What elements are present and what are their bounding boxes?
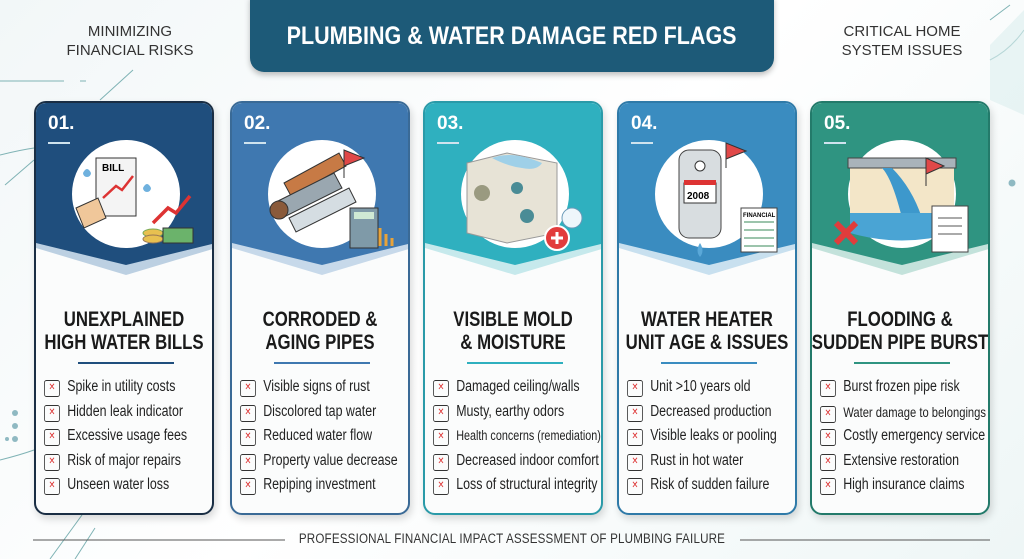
panel: card 2: AGING PIPES [265,331,375,354]
list [44,378,187,495]
panel: card 5: 05. [824,113,850,134]
side label: left [66,23,193,59]
panel: card 3 [423,101,603,515]
panel: card 3: Loss of structural integrity [456,476,597,493]
panel: card 4: Unit >10 years old [650,378,750,395]
icon: bill with rising arrow [72,140,194,248]
panel: card 5: SUDDEN PIPE BURST [812,331,988,354]
panel: card 3: 03. [437,113,463,134]
panel: card 3: Health concerns (remediation) [456,428,601,443]
panel: card 1: 01. [48,113,74,134]
panel: card 3: Damaged ceiling/walls [456,378,580,395]
panel: card 5: High insurance claims [843,476,964,493]
panel: card 2: Repiping investment [263,476,376,493]
list: Excessive usage fees [67,427,187,444]
list: Unseen water loss [67,476,169,493]
panel: card 2: Reduced water flow [263,427,372,444]
panel: card 4 [617,101,797,515]
panel: card 2: Discolored tap water [263,403,376,420]
footer line [33,540,990,541]
title [250,0,774,72]
panel: card 4: Risk of sudden failure [650,476,769,493]
title: PLUMBING & WATER DAMAGE RED FLAGS [287,22,737,50]
panel: card 5: FLOODING & [847,308,953,331]
icon: corroded pipes [268,140,394,248]
panel: card 2 [230,101,410,515]
panel: card 2: Property value decrease [263,452,398,469]
footer text: PROFESSIONAL FINANCIAL IMPACT ASSESSMENT OF PLUMBING FAILURE [299,531,725,546]
side label: right [842,23,962,59]
icon: mold wall [461,140,582,251]
panel: card 3: VISIBLE MOLD [453,308,573,331]
panel: card 5: Costly emergency service [843,427,985,444]
panel: card 2: CORRODED & [263,308,377,331]
panel: card 5 [810,101,990,515]
panel: card 5: Water damage to belongings [843,404,986,420]
panel: card 4: 04. [631,113,657,134]
side label: left: FINANCIAL RISKS [66,42,193,59]
card title [44,308,204,354]
panel: card 4: UNIT AGE & ISSUES [626,331,788,354]
panel: card 4: Rust in hot water [650,452,743,469]
side label: left: MINIMIZING [88,23,172,40]
card title: UNEXPLAINED [64,308,184,331]
icon: water heater: 2008 [687,191,710,202]
icon: bill with rising arrow: BILL [102,163,124,174]
list: Spike in utility costs [67,378,175,395]
list: Risk of major repairs [67,452,181,469]
icon: water heater [655,140,778,257]
panel: card 5: Extensive restoration [843,452,959,469]
side label: right: CRITICAL HOME [844,23,960,40]
panel: card 2: 02. [244,113,270,134]
panel: card 3: Musty, earthy odors [456,403,564,420]
panel: card 1 [34,101,214,515]
panel: card 3: & MOISTURE [460,331,566,354]
panel: card 5: Burst frozen pipe risk [843,378,960,395]
panel: card 2: Visible signs of rust [263,378,370,395]
list: Hidden leak indicator [67,403,183,420]
icon: burst pipe flood [834,140,968,252]
panel: card 4: Visible leaks or pooling [650,427,777,444]
card title: HIGH WATER BILLS [44,331,204,354]
side label: right: SYSTEM ISSUES [842,42,962,59]
panel: card 3: Decreased indoor comfort [456,452,599,469]
panel: card 4: WATER HEATER [641,308,773,331]
panel: card 4: Decreased production [650,403,772,420]
icon: water heater: FINANCIAL [743,213,776,219]
